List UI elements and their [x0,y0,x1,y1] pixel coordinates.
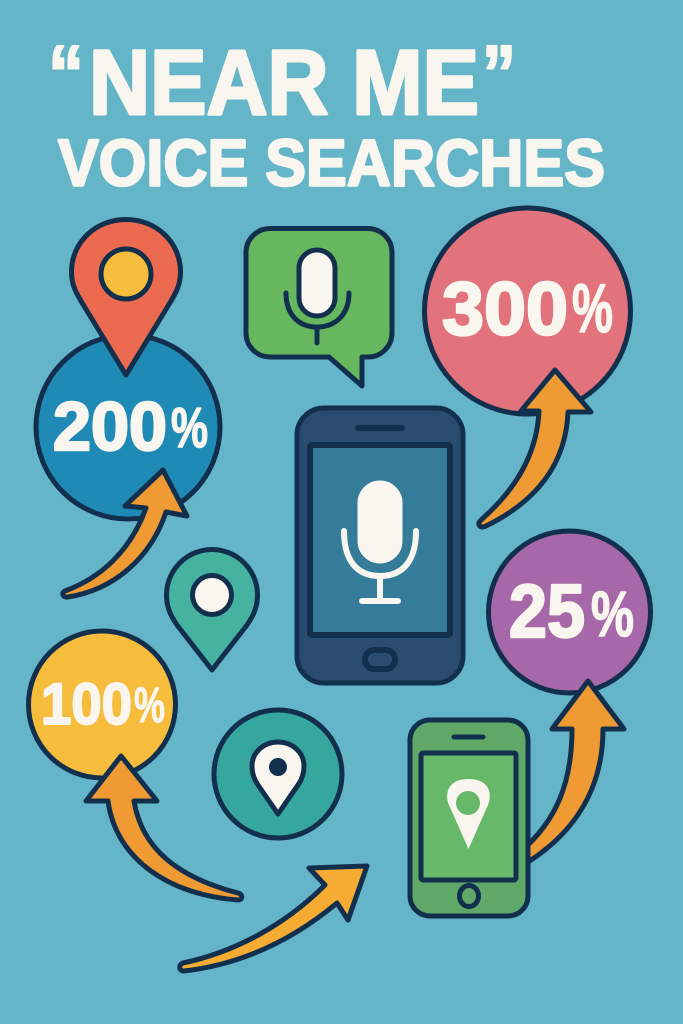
blue stat circle: 200%: % [171,396,208,460]
stat circle: 25% [488,531,650,693]
arrow: up to 100% [86,756,242,900]
title: VOICE SEARCHES [58,126,605,200]
icon: teal location pin [166,550,258,670]
stat circle: 100%: % [134,677,165,733]
stat circle: 100%: 100 [41,672,132,737]
icon: teal circle with pin [214,710,342,838]
stat circle: 100% [28,631,176,778]
green phone with pin [410,720,528,916]
stat circle: 300% [424,208,630,414]
stat circle: 300%: % [572,270,613,347]
title: NEAR ME [89,32,479,134]
icon: red location pin [72,220,180,375]
stat circle: 300%: 300 [442,266,568,350]
title: ” [482,29,516,118]
arrow: up to 300% [479,370,591,527]
title [48,29,605,200]
arrow: up to 200% [63,470,187,597]
arrow: up to 25% [520,681,624,862]
blue stat circle: 200%: 200 [53,388,167,465]
icon: green speech bubble with microphone [246,228,392,386]
arrow: up toward green phone [180,866,367,971]
stat circle: 25%: 25 [509,569,585,653]
stat circle: 25%: % [591,578,634,650]
title: “ [48,29,84,118]
blue stat circle: 200% [36,335,220,519]
central phone with microphone [297,408,463,683]
